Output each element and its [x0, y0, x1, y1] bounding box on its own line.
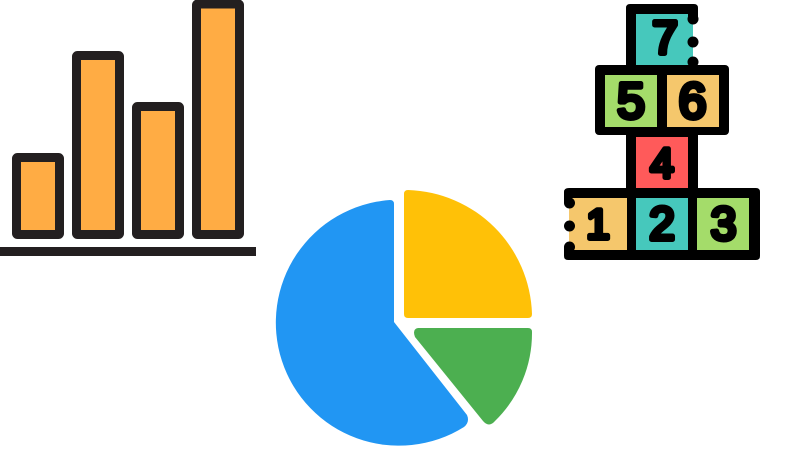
square 4: 4 — [650, 140, 674, 186]
bar 3 — [136, 106, 180, 234]
pie slice: blue — [276, 200, 468, 446]
squares 1, 2 and 3: 3 — [711, 198, 736, 250]
squares 1, 2 and 3: 1 — [586, 200, 610, 248]
pie slice: green — [414, 328, 532, 424]
squares 5 and 6 — [595, 65, 729, 135]
icon: pie chart — [276, 190, 532, 446]
squares 1, 2 and 3 — [564, 188, 760, 260]
square 7 — [626, 4, 698, 68]
bar 2 — [76, 56, 120, 234]
squares 5 and 6: 5 — [617, 73, 645, 129]
bar 1 — [16, 158, 60, 234]
squares 5 and 6: 6 — [679, 73, 706, 129]
square 4 — [626, 132, 698, 192]
square 7: 7 — [652, 12, 678, 64]
icon: hopscotch grid — [564, 4, 760, 260]
chart baseline — [0, 247, 256, 256]
pie slice: yellow — [404, 190, 532, 318]
icon: bar chart — [0, 4, 256, 256]
bar 4 — [196, 4, 240, 234]
squares 1, 2 and 3: 2 — [649, 198, 675, 250]
